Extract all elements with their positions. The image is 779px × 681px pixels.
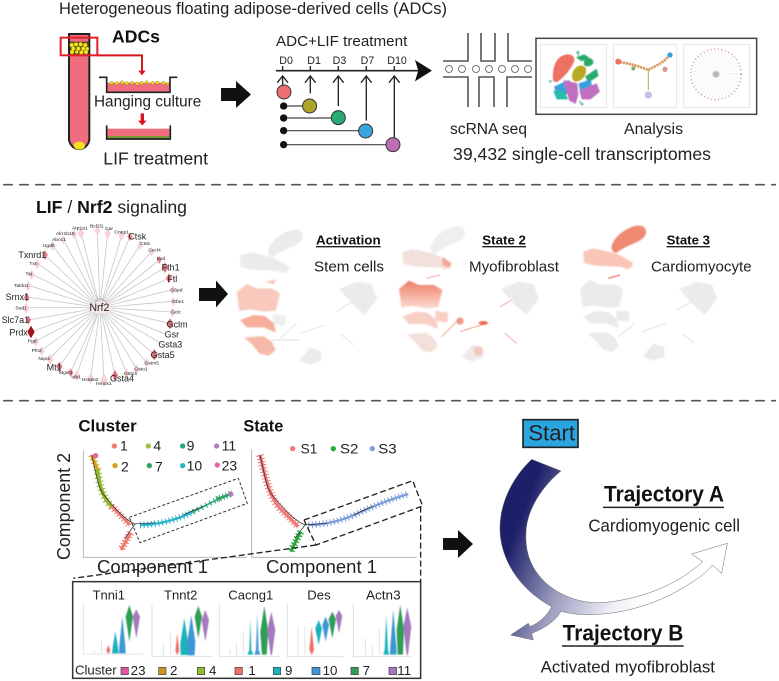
panel: violin plots: 10 xyxy=(323,663,337,678)
panel: violin plots: 7 xyxy=(363,663,370,678)
panel: treatment timeline: D0 xyxy=(279,55,293,67)
network: Nrf2: Gstm5 xyxy=(144,360,159,366)
trajectory B label: Trajectory B xyxy=(563,621,683,646)
umap: state 2 xyxy=(399,226,560,361)
network: Nrf2: Gsr xyxy=(165,329,179,339)
panel: treatment timeline: D3 xyxy=(333,55,346,67)
network: Nrf2: Gclm xyxy=(167,319,188,329)
arrow: plots to trajectory xyxy=(443,530,473,558)
network: Nrf2: Nqo1 xyxy=(38,356,50,362)
network: Nrf2: Taldo1 xyxy=(14,283,29,289)
network: Nrf2: Ctsk xyxy=(140,241,150,247)
trajectory arrow xyxy=(500,459,727,640)
network: Nrf2: Hmox1 xyxy=(96,381,112,387)
panel: violin plots: 23 xyxy=(131,663,145,678)
panel: treatment timeline: ADC+LIF treatment xyxy=(276,33,408,50)
network: Nrf2: Ugdh xyxy=(43,243,55,249)
chart: state trajectory: S2 xyxy=(340,441,358,456)
network: Nrf2: Gsta4 xyxy=(110,374,134,384)
chart: cluster trajectory: 4 xyxy=(153,438,161,454)
panel: ADC culture schematic xyxy=(61,27,208,169)
panel: violin plots: Des xyxy=(307,587,331,602)
network: Nrf2: Akr1b10 xyxy=(56,231,75,237)
chart: cluster trajectory: 7 xyxy=(155,459,163,475)
network: Nrf2: Gstp1 xyxy=(124,371,138,377)
panel: ADC culture schematic: ADCs xyxy=(112,27,160,47)
network: Nrf2: Ctsk xyxy=(128,232,147,242)
transcriptome count: 39,432 single-cell transcriptomes xyxy=(453,144,711,164)
network: Nrf2: Car xyxy=(105,226,113,232)
network: Nrf2: Bcl2l1 xyxy=(90,224,104,230)
analysis label: Analysis xyxy=(624,121,683,138)
trajectory A label xyxy=(588,482,740,536)
panel: violin plots: 9 xyxy=(285,663,292,678)
panel: violin plots: 2 xyxy=(170,663,177,678)
network: Nrf2: Gsta5 xyxy=(151,350,175,360)
chart: cluster trajectory xyxy=(78,417,247,557)
network: Nrf2: Gclc xyxy=(171,310,181,316)
chart: cluster trajectory: Cluster xyxy=(78,417,137,436)
network: Nrf2 xyxy=(2,224,188,387)
network: Nrf2: Fth1 xyxy=(162,262,180,272)
panel: violin plots: Actn3 xyxy=(366,587,401,602)
chart: cluster trajectory: 9 xyxy=(187,438,195,454)
network: Nrf2: Idh1 xyxy=(71,374,81,380)
umap: state 2: Myofibroblast xyxy=(469,259,560,276)
chart: cluster trajectory: 2 xyxy=(121,459,129,475)
network: Nrf2: Tkt xyxy=(25,272,33,278)
network: Nrf2: Hsatio2 xyxy=(82,377,99,383)
panel: treatment timeline: D1 xyxy=(307,55,321,67)
start box: Start xyxy=(528,421,575,446)
umap: state 2: State 2 xyxy=(482,232,526,247)
panel: ADC culture schematic: Hanging culture xyxy=(94,94,201,111)
network: Nrf2: Atp1a1 xyxy=(72,226,88,232)
umap: activation: Stem cells xyxy=(314,259,384,276)
panel: violin plots: 4 xyxy=(209,663,217,678)
chart: state trajectory xyxy=(73,417,423,582)
panel: violin plots: Tnni1 xyxy=(93,587,125,602)
umap: activation: Activation xyxy=(316,232,381,247)
panel: treatment timeline xyxy=(276,33,432,152)
panel: scRNA seq chip: scRNA seq xyxy=(450,121,527,138)
panel: ADC culture schematic: LIF treatment xyxy=(103,149,208,169)
network: Nrf2: Cnep1 xyxy=(114,230,129,236)
trajectory B label xyxy=(541,621,715,676)
heading: LIF / Nrf2 signaling: LIF / Nrf2 signaling xyxy=(36,197,187,217)
network: Nrf2: Nrf2 xyxy=(89,302,110,314)
network: Nrf2: Pgd xyxy=(28,339,37,345)
network: Nrf2: Esd xyxy=(157,256,165,262)
network: Nrf2: Pfn2 xyxy=(32,348,42,354)
network: Nrf2: Slc7a1 xyxy=(2,315,29,325)
network: Nrf2: Gbe1 xyxy=(172,299,184,305)
network: Nrf2: Abcc1 xyxy=(52,237,66,243)
panel: treatment timeline: D10 xyxy=(387,55,407,67)
panel: analysis thumbnails xyxy=(536,38,757,114)
network: Nrf2: Gsto1 xyxy=(134,367,148,373)
network: Nrf2: Cxcl4 xyxy=(148,248,161,254)
panel: violin plots: Cacng1 xyxy=(228,587,273,602)
network: Nrf2: Prdx xyxy=(9,327,28,337)
umap: activation xyxy=(237,230,384,365)
chart: cluster trajectory: 23 xyxy=(222,458,237,474)
panel: violin plots: 1 xyxy=(248,663,256,678)
network: Nrf2: Mgst1 xyxy=(59,370,73,376)
arrow: network to umaps xyxy=(199,280,228,308)
panel: violin plots: 11 xyxy=(397,663,411,678)
arrow: culture to timeline xyxy=(221,81,251,108)
chart: state trajectory: S3 xyxy=(378,441,397,456)
trajectory A label: Trajectory A xyxy=(604,482,724,507)
network: Nrf2: Txn xyxy=(29,261,38,267)
umap: state 3 xyxy=(580,226,752,361)
title: Heterogeneous floating adipose-derived cells (ADCs) xyxy=(59,0,447,18)
network: Nrf2: Txnrd1 xyxy=(18,250,46,260)
axis label: Component 1 right: Component 1 xyxy=(266,556,377,577)
chart: cluster trajectory: 1 xyxy=(120,438,128,454)
chart: state trajectory: S1 xyxy=(301,441,317,456)
chart: state trajectory: State xyxy=(243,417,283,436)
panel: treatment timeline: D7 xyxy=(361,55,374,67)
chart: cluster trajectory: 11 xyxy=(222,438,236,454)
chart: cluster trajectory: 10 xyxy=(187,458,202,474)
network: Nrf2: Srnx1 xyxy=(6,292,29,302)
network: Nrf2: G6pd xyxy=(170,287,183,293)
network: Nrf2: Ftl xyxy=(167,274,177,284)
panel: violin plots: Tnnt2 xyxy=(164,587,197,602)
panel: scRNA seq chip xyxy=(443,33,532,138)
axis label: Component 2: Component 2 xyxy=(54,453,74,560)
trajectory A label: Cardiomyogenic cell xyxy=(588,516,740,536)
axis label: Component 1 left: Component 1 xyxy=(97,556,208,577)
network: Nrf2: Gsta3 xyxy=(158,340,182,350)
network: Nrf2: Sod1 xyxy=(15,305,27,311)
umap: state 3: State 3 xyxy=(667,232,710,247)
network: Nrf2: Mt1 xyxy=(47,362,62,372)
panel: violin plots: Cluster xyxy=(75,662,117,677)
umap: state 3: Cardiomyocyte xyxy=(651,259,752,276)
trajectory B label: Activated myofibroblast xyxy=(541,657,715,676)
panel: violin plots xyxy=(73,582,421,678)
